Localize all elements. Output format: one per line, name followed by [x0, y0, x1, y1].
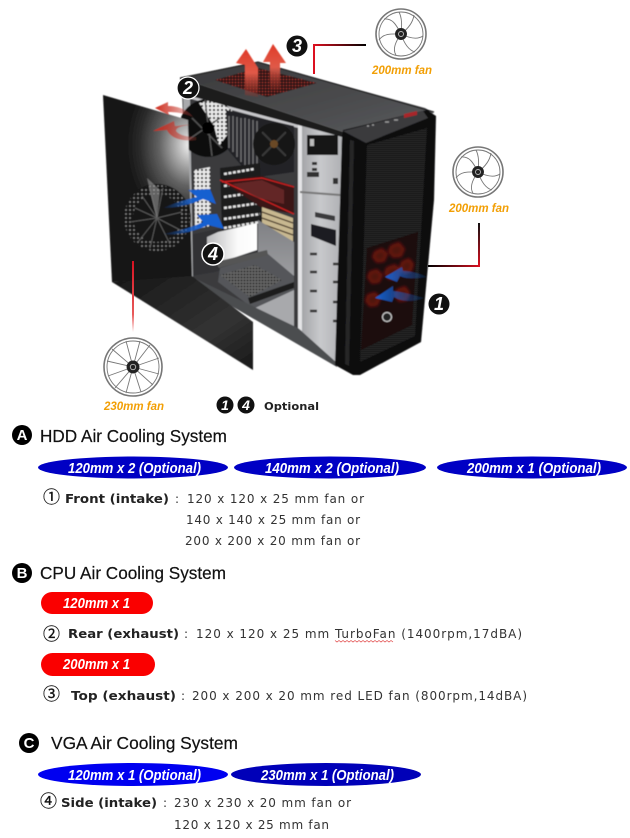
icon: 200mm front fan — [453, 147, 503, 197]
side intake spec: 120 x 120 x 25 mm fan — [174, 818, 329, 832]
pill 230mm x 1 optional — [231, 763, 421, 786]
section A: HDD air cooling — [12, 425, 627, 548]
section C: VGA air cooling — [19, 733, 421, 832]
lower compartment wall — [258, 220, 294, 276]
pill 120mm x 1 optional: 120mm x 1 (Optional) — [68, 767, 201, 784]
label: side fan size: 230mm fan — [103, 399, 164, 413]
lower compartment floor — [215, 250, 294, 330]
label: front fan size: 200mm fan — [448, 201, 509, 215]
top exhaust spec — [43, 680, 527, 705]
front intake spec — [43, 483, 364, 548]
graphics card — [220, 176, 294, 244]
top panel — [180, 62, 434, 137]
callout line: front fan — [428, 223, 480, 267]
front panel — [335, 110, 436, 375]
side panel — [103, 95, 253, 370]
heading A: HDD Air Cooling System — [40, 426, 227, 446]
top exhaust arrows — [236, 44, 286, 97]
heading A: A — [17, 427, 28, 444]
badge 3 — [286, 36, 308, 56]
front intake spec: 140 x 140 x 25 mm fan or — [186, 513, 360, 527]
legend: optional fans: 4 — [241, 397, 250, 413]
pill 230mm x 1 optional: 230mm x 1 (Optional) — [260, 767, 394, 784]
left rim of case — [183, 92, 193, 278]
pill 200mm x 1: 200mm x 1 — [62, 656, 130, 673]
legend: optional fans: 1 — [221, 397, 229, 413]
heading B: B — [17, 565, 28, 582]
front intake spec: ① — [43, 483, 60, 508]
callout line: top fan — [313, 44, 366, 74]
rear exhaust spec: Rear (exhaust) — [68, 627, 179, 641]
logo badge — [382, 312, 392, 322]
icon: 230mm side fan — [104, 338, 162, 396]
pill 120mm x 2: 120mm x 2 (Optional) — [68, 460, 201, 477]
pill 120mm x 2 — [38, 456, 228, 478]
side intake arrows — [163, 189, 224, 234]
top exhaust spec: Top (exhaust) — [71, 689, 176, 703]
legend: optional fans: Optional — [264, 400, 319, 413]
side intake spec: ④ — [40, 787, 57, 812]
heading C: C — [24, 735, 35, 752]
front intake arrows — [375, 267, 427, 302]
legend: optional fans — [216, 396, 319, 414]
side intake spec: Side (intake) — [61, 796, 157, 810]
badge 3: 3 — [292, 36, 302, 56]
icon: 200mm top fan — [376, 9, 426, 59]
section B: CPU air cooling — [12, 563, 527, 705]
badge 1: 1 — [434, 294, 444, 314]
rear exhaust spec — [43, 620, 522, 645]
rear wall lower — [190, 220, 258, 276]
rear exhaust spec: ② — [43, 620, 60, 645]
rear exhaust spec: : — [184, 627, 188, 641]
badge 4 — [202, 243, 224, 265]
case interior — [179, 92, 343, 367]
label: top fan size: 200mm fan — [371, 63, 432, 77]
pill 140mm x 2 — [234, 456, 426, 478]
pill 140mm x 2: 140mm x 2 (Optional) — [265, 460, 399, 477]
rear exhaust spec: 120 x 120 x 25 mm TurboFan (1400rpm,17dBA) — [196, 627, 522, 641]
expansion slots — [220, 163, 262, 232]
front intake spec: Front (intake) — [65, 492, 169, 506]
badge 4: 4 — [207, 244, 218, 264]
badge 1 — [428, 294, 450, 314]
badge 2 — [177, 77, 199, 99]
exhaust fan — [179, 99, 237, 157]
side panel fan — [123, 178, 191, 252]
top exhaust spec: 200 x 200 x 20 mm red LED fan (800rpm,14dBA) — [192, 689, 527, 703]
badge 2: 2 — [182, 78, 193, 98]
front intake spec: : — [175, 492, 179, 506]
side intake spec: 230 x 230 x 20 mm fan or — [174, 796, 351, 810]
heading C: VGA Air Cooling System — [51, 733, 238, 753]
heading B: CPU Air Cooling System — [40, 563, 226, 583]
callout line: side fan — [132, 261, 134, 332]
bright opening — [207, 223, 257, 263]
CPU heat sink — [226, 110, 295, 178]
pill 200mm x 1: 200mm x 1 (Optional) — [466, 460, 601, 477]
rear exhaust arrows — [153, 102, 196, 140]
pill 120mm x 1: 120mm x 1 — [63, 595, 130, 612]
top exhaust spec: ③ — [43, 680, 60, 705]
front intake spec: 200 x 200 x 20 mm fan or — [185, 534, 360, 548]
front intake spec: 120 x 120 x 25 mm fan or — [187, 492, 364, 506]
computer case illustration — [103, 44, 436, 375]
pill 200mm x 1 — [41, 653, 155, 676]
drive cage — [298, 124, 342, 363]
pill 200mm x 1 — [437, 456, 627, 478]
red fan mesh — [361, 232, 418, 350]
side intake spec: : — [163, 796, 167, 810]
top exhaust spec: : — [181, 689, 185, 703]
perforated rear panel — [194, 167, 211, 229]
top rim of case — [182, 92, 298, 128]
side intake spec — [40, 787, 351, 832]
pill 120mm x 1 — [41, 592, 153, 614]
pill 120mm x 1 optional — [38, 763, 228, 786]
bottom rim — [190, 276, 337, 367]
